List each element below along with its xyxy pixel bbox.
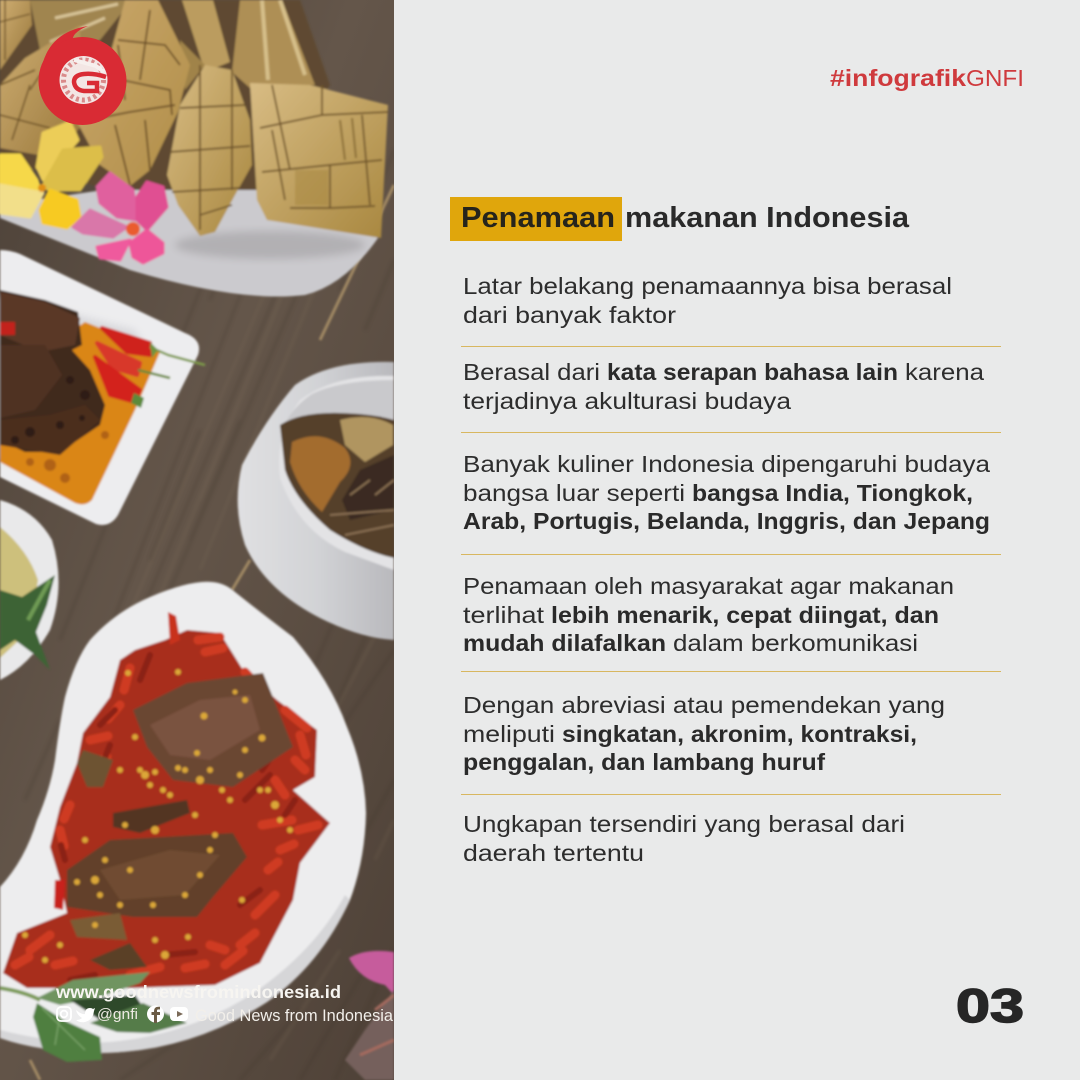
page number: 03 <box>956 979 1024 1032</box>
social handle: @gnfi <box>97 1006 138 1023</box>
ketupat: top stems <box>30 0 315 90</box>
icon: facebook <box>147 1006 164 1023</box>
flower: frangipani <box>0 122 102 228</box>
social media row <box>56 1006 393 1023</box>
title highlight <box>450 197 622 241</box>
ketupat: centre left <box>76 0 190 186</box>
dark backdrop behind ketupat <box>0 0 330 190</box>
point: kata serapan: terjadinya akulturasi budaya <box>463 388 791 414</box>
point: penamaan oleh masyarakat: terlihat <box>463 602 545 628</box>
point: budaya bangsa luar: bangsa India, Tiongkok, <box>692 480 973 506</box>
plank seam <box>30 185 394 1080</box>
website url: www.goodnewsfromindonesia.id <box>55 982 341 1002</box>
bowl: white bowl <box>238 362 394 640</box>
rendang meat <box>0 290 105 452</box>
point: abreviasi: singkatan, akronim, kontraksi, <box>562 721 917 747</box>
point: kata serapan: Berasal dari <box>463 359 600 385</box>
right panel background <box>394 0 1080 1080</box>
hashtag: #infografik <box>830 65 966 91</box>
point: kata serapan: kata serapan bahasa lain <box>607 359 898 385</box>
point: penamaan oleh masyarakat: mudah dilafalkan <box>463 630 666 656</box>
chillies <box>95 328 205 408</box>
plate: rendang <box>0 250 205 525</box>
chilli seeds <box>22 669 293 963</box>
point: budaya bangsa luar: bangsa luar seperti <box>463 480 685 506</box>
point: penamaan oleh masyarakat: Penamaan oleh masyarakat agar makanan <box>463 573 954 599</box>
wooden table <box>0 0 394 1080</box>
title <box>450 197 910 241</box>
point: penamaan oleh masyarakat: dalam berkomunikasi <box>673 630 918 656</box>
facebook page name: Good News from Indonesia <box>195 1007 394 1025</box>
intro text <box>463 273 952 328</box>
point: abreviasi <box>463 692 945 775</box>
bowl: small sauce bowl <box>0 500 59 680</box>
intro text: dari banyak faktor <box>463 302 676 328</box>
point: penamaan oleh masyarakat <box>463 573 954 656</box>
point: budaya bangsa luar: Banyak kuliner Indonesia dipengaruhi budaya <box>463 451 990 477</box>
beef <box>133 673 293 787</box>
ketupat: left <box>0 25 82 158</box>
icon: instagram <box>57 1007 71 1021</box>
point: ungkapan daerah <box>463 811 905 866</box>
dendeng chilli heap <box>3 612 330 988</box>
leaf garnish <box>0 972 187 1062</box>
point: abreviasi: meliputi <box>463 721 555 747</box>
point: kata serapan: karena <box>905 359 984 385</box>
ketupat: right square <box>250 83 388 238</box>
intro text: Latar belakang penamaannya bisa berasal <box>463 273 952 299</box>
point: ungkapan daerah: Ungkapan tersendiri yang berasal dari <box>463 811 905 837</box>
hashtag: GNFI <box>966 65 1024 91</box>
icon: twitter <box>76 1008 95 1022</box>
ketupat: top left <box>0 0 32 70</box>
ketupat: centre spindle <box>167 65 252 236</box>
pink flower and glass, bottom right <box>345 951 394 1080</box>
point: budaya bangsa luar: Arab, Portugis, Belanda, Inggris, dan Jepang <box>463 508 990 534</box>
food photograph panel <box>0 0 394 1080</box>
bowl food <box>280 413 394 558</box>
icon: youtube <box>170 1007 188 1021</box>
orange sauce <box>0 322 160 504</box>
point: abreviasi: Dengan abreviasi atau pemendekan yang <box>463 692 945 718</box>
point: kata serapan <box>463 359 984 414</box>
point: budaya bangsa luar <box>463 451 990 534</box>
logo: GNFI <box>38 26 126 125</box>
point: penamaan oleh masyarakat: lebih menarik, cepat diingat, dan <box>551 602 939 628</box>
plate: big dendeng plate <box>0 582 366 1053</box>
point: ungkapan daerah: daerah tertentu <box>463 840 644 866</box>
point: abreviasi: penggalan, dan lambang huruf <box>463 749 825 775</box>
hashtag <box>830 65 1024 91</box>
title: makanan Indonesia <box>625 202 910 234</box>
plate: ketupat plate <box>0 188 380 298</box>
title: Penamaan <box>461 202 615 234</box>
flower: pink <box>73 173 167 263</box>
